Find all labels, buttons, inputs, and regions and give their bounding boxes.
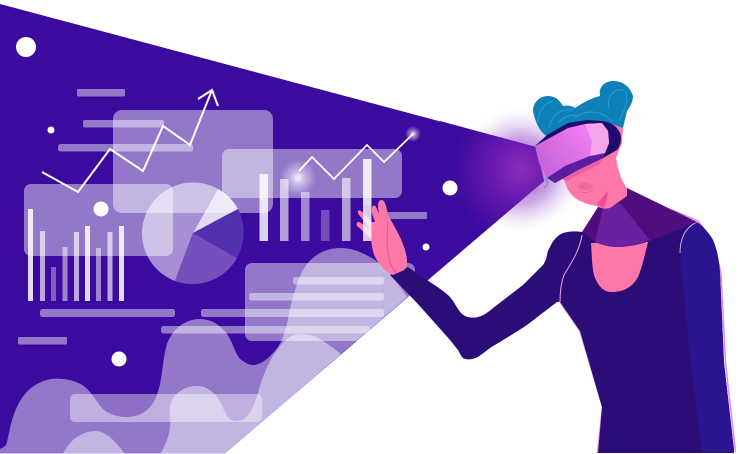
pie sector: medium — [175, 233, 237, 284]
hair — [533, 81, 633, 145]
bar chart: left — [28, 209, 124, 301]
lower lip line — [580, 188, 593, 193]
chest skin — [591, 242, 648, 292]
beam hot spot near headset — [440, 121, 544, 244]
pie sector: light left — [142, 182, 218, 281]
right seam line — [680, 222, 697, 253]
headset back strap — [535, 120, 621, 183]
headset lower band — [547, 153, 605, 183]
line chart: arrow trend — [42, 90, 218, 192]
headset visor highlight — [585, 123, 609, 156]
hair wisp — [544, 178, 547, 188]
dress rim light — [560, 210, 736, 453]
line chart: right trend — [299, 134, 413, 179]
sleeve highlight — [680, 222, 734, 453]
face shadow under headset — [562, 156, 605, 181]
bar overlay on fingers — [363, 205, 372, 241]
projection beam — [0, 4, 544, 454]
hair strands — [538, 90, 627, 128]
data panels inside beam — [0, 89, 427, 454]
pie sector: brightest — [193, 189, 238, 233]
panel: bottom strip — [70, 394, 262, 422]
panel: left bar chart — [24, 184, 173, 256]
wave area: front — [160, 334, 341, 454]
headset visor — [535, 123, 609, 178]
wave area: small bottom bump — [63, 431, 125, 454]
wave area: back — [0, 248, 407, 454]
glow around headset — [459, 108, 583, 232]
dress and arm — [390, 222, 734, 453]
left seam line — [560, 235, 582, 302]
light spark: chart — [280, 160, 316, 196]
hand — [356, 200, 407, 275]
neck and face — [563, 124, 627, 209]
collar dark — [582, 188, 697, 247]
pie chart — [142, 182, 244, 284]
palm crease — [387, 222, 397, 273]
panel: right line chart — [222, 149, 402, 198]
panel: lower right text — [245, 263, 415, 341]
panel: top centre — [113, 110, 273, 213]
pie sector: dark — [193, 209, 244, 258]
bar chart: right — [260, 159, 372, 241]
lips — [577, 183, 593, 190]
collar centre — [595, 203, 650, 247]
text placeholder lines — [18, 89, 427, 344]
neck shadow — [597, 191, 608, 208]
floating dots — [16, 37, 458, 366]
woman figure — [356, 81, 736, 453]
light spark: line end — [405, 126, 421, 142]
